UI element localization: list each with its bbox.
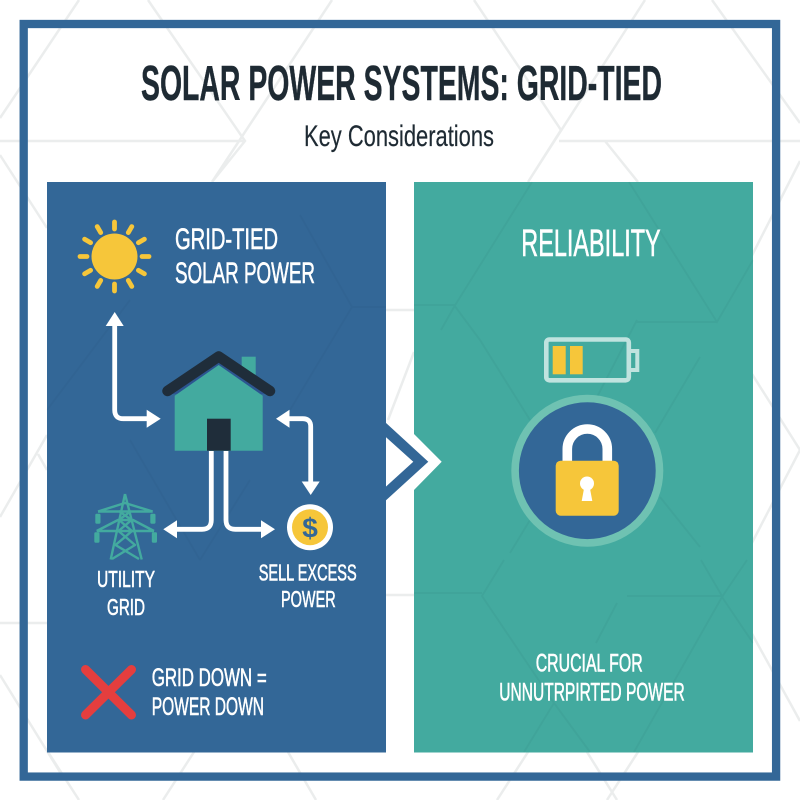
- label: sell excess power: POWER: [281, 586, 336, 612]
- subtitle: Key Considerations: [304, 120, 494, 153]
- arrow: house to sun and sun to house: [106, 312, 161, 428]
- caption: UNNUTRPIRTED POWER: [499, 678, 685, 706]
- arrow: house to excess power: [276, 410, 320, 495]
- warning text: POWER DOWN: [152, 693, 264, 721]
- icon: padlock badge: [515, 398, 660, 543]
- icon: battery: [546, 340, 637, 380]
- icon: dollar coin: $: [302, 512, 318, 544]
- label: utility grid: GRID: [107, 594, 145, 620]
- icon: dollar coin: [287, 504, 333, 550]
- panel heading: RELIABILITY: [521, 223, 661, 265]
- caption: CRUCIAL FOR: [536, 650, 643, 678]
- panel: reliability: [414, 182, 753, 752]
- caption: [499, 650, 685, 706]
- label: sell excess power: SELL EXCESS: [259, 560, 357, 586]
- label: utility grid: UTILITY: [97, 566, 155, 592]
- warning text: GRID DOWN =: [152, 664, 267, 692]
- icon: sun: [80, 222, 149, 291]
- label: utility grid: [97, 566, 155, 620]
- panel heading: GRID-TIED: [175, 223, 278, 256]
- arrow: chevron between panels: [386, 422, 442, 501]
- icon: house: [168, 356, 270, 451]
- label: sell excess power: [259, 560, 357, 612]
- panel heading: SOLAR POWER: [175, 257, 315, 290]
- icon: utility tower: [96, 494, 156, 560]
- warning text: [152, 664, 267, 721]
- arrow: house to sell excess: [226, 451, 275, 538]
- arrow: house to utility grid: [163, 451, 211, 538]
- panel: grid-tied solar power: [47, 182, 386, 752]
- panel heading: [175, 223, 315, 290]
- icon: red x: [86, 670, 132, 715]
